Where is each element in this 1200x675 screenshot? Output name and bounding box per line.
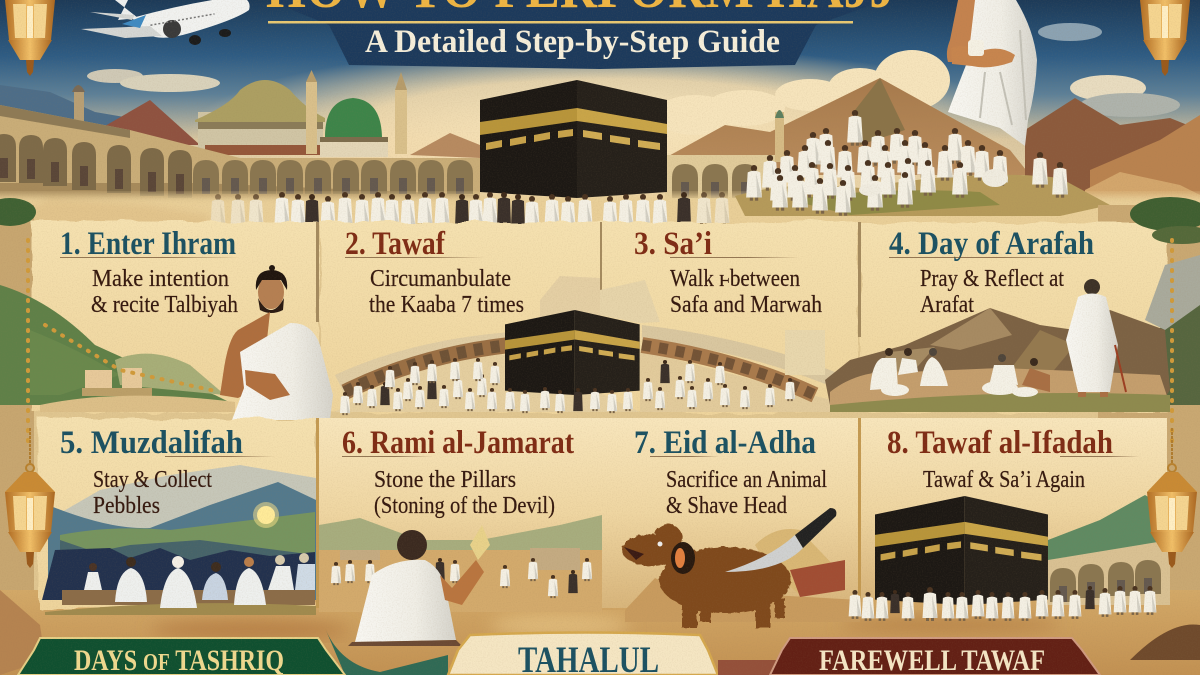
ground sand [0,195,1200,235]
seated group [84,553,315,608]
step 2 heading: 2. Tawaf [345,226,446,262]
arcade 8 [1048,540,1170,605]
crowd 6 [331,558,592,598]
mosque with domes [72,70,407,157]
step 4 text [920,266,1064,318]
subtitle: A Detailed Step-by-Step Guide [365,24,780,60]
hill of pilgrims [735,110,1110,216]
step 5 heading: 5. Muzdalifah [60,425,243,461]
banner: farewell tawaf [718,638,1100,675]
step 1 text: & recite Talbiyah [91,292,238,318]
panel 3: sa'i [634,226,850,412]
panel 8: tawaf al-ifadah [849,418,1170,621]
step 1 heading: 1. Enter Ihram [60,226,236,262]
step 2 text: Circumanbulate [370,266,511,292]
panel 1: enter ihram [0,226,333,420]
step 7 heading: 7. Eid al-Adha [634,425,816,461]
step 2 text: the Kaaba 7 times [369,292,524,318]
step 4 heading: 4. Day of Arafah [889,226,1094,262]
step 4 text: Arafat [920,292,974,318]
main row of pilgrims [210,192,730,230]
sheep face [624,542,695,574]
step 1 text [91,266,238,318]
panel 6: rami al-jamarat [316,418,602,646]
beads chains [28,240,1172,450]
step 1 text: Make intention [92,266,229,292]
heading underlines [60,257,1140,457]
panel 2: tawaf [335,226,660,415]
banner: tahalul [448,632,718,675]
standing pilgrim figure [947,0,1037,146]
step 8 text: Tawaf & Sa’i Again [923,467,1085,493]
mountains right [665,78,1200,210]
step 6 text: (Stoning of the Devil) [374,493,555,519]
panel 5: muzdalifah [42,425,316,615]
crowd 8 [849,586,1156,621]
lantern lower left [5,428,55,568]
sack [755,529,845,597]
right side landscape [1145,255,1200,405]
panel 7: eid al-adha [602,418,861,628]
mountains left [98,100,480,158]
kaaba 2 [505,310,640,395]
standing pilgrim [1066,279,1126,397]
crowd 3 [643,360,795,410]
step 2 text [369,266,524,318]
rocks [0,590,1200,675]
lantern top right [1140,0,1190,76]
sky background [0,0,1200,225]
ground mottling [150,613,1060,640]
dividers [316,222,861,337]
step 7 text: Sacrifice an Animal [666,467,827,493]
step 3 text: Walk ⱶbetween [670,266,800,292]
side margins [0,205,1200,675]
lantern lower right [1147,428,1197,568]
sheep [622,524,791,628]
main kaaba [480,80,667,198]
kaaba 8 [875,496,1048,605]
blue haze mountains [0,85,130,130]
panel row one [32,222,1167,412]
step 3 heading: 3. Sa’i [634,226,712,262]
pilgrim man in ihram [220,265,333,420]
panel 4: arafah [825,226,1170,412]
step 5 text [93,467,212,519]
stone-throwing pilgrim [348,525,490,646]
airplane [81,0,250,45]
banner: days of tashriq [18,628,448,675]
step 7 text: & Shave Head [666,493,787,519]
crowd 2 [340,358,633,415]
trees [0,197,1200,244]
step 4 text: Pray & Reflect at [920,266,1064,292]
title ribbon [268,0,885,69]
step 5 text: Pebbles [93,493,160,519]
clouds [87,23,1180,135]
step 5 text: Stay & Collect [93,467,212,493]
seated pilgrims [870,348,1050,397]
panel row two [38,418,316,608]
step 3 text: Safa and Marwah [670,292,822,318]
lantern top left [5,0,55,76]
step 3 text [670,266,822,318]
step 6 heading: 6. Rami al-Jamarat [342,425,574,461]
step 8 heading: 8. Tawaf al-Ifadah [887,425,1113,461]
arcade right of kaaba [665,110,784,200]
arcade left [0,105,480,205]
lower ground [0,590,1200,675]
step 7 text [666,467,827,519]
step 6 text: Stone the Pillars [374,467,516,493]
knife [725,508,836,572]
step 6 text [374,467,555,519]
